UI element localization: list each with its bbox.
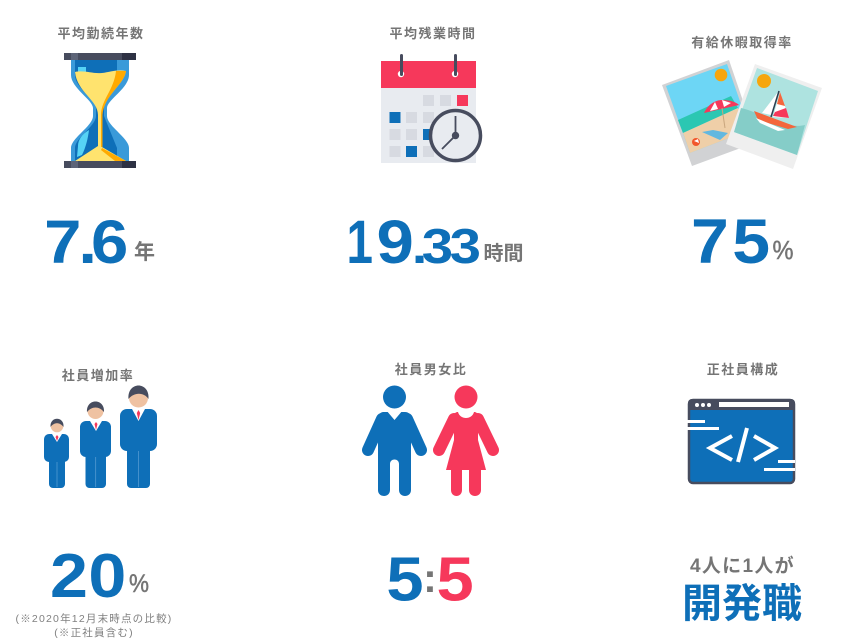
- heading: average tenure: 平均勤続年数: [57, 26, 145, 41]
- small employee: [44, 419, 69, 488]
- panel: gender ratio: [368, 362, 493, 614]
- heading: paid leave rate: 有給休暇取得率: [691, 35, 793, 50]
- value: 20 percent: %: [129, 570, 149, 598]
- value: 5 to 5 ratio: :: [423, 555, 437, 601]
- heading: employee growth rate: 社員増加率: [62, 368, 134, 383]
- value: 7.6 years: 年: [134, 241, 155, 264]
- value: 1 in 4 are developers: 開発職: [682, 582, 802, 626]
- footnote: comparison basis: (※2020年12月末時点の比較): [16, 612, 172, 625]
- value: 75 percent: %: [772, 235, 794, 265]
- icon: hourglass: [64, 53, 136, 168]
- value: 5 to 5 ratio: [386, 545, 474, 614]
- icon: code window: [687, 399, 795, 483]
- value: 20 percent: 20: [50, 541, 126, 610]
- value: 75 percent: 75: [691, 206, 770, 276]
- value: 19.33 hours: 1: [346, 207, 373, 276]
- panel: employee growth rate: [16, 368, 172, 638]
- footnote: comparison basis: [16, 612, 172, 638]
- icon: three growing employees: [44, 386, 157, 488]
- medium employee: [80, 402, 111, 488]
- value: 19.33 hours: 9: [377, 208, 414, 276]
- panel: average overtime: [346, 26, 524, 276]
- value: 19.33 hours: 時間: [484, 242, 524, 265]
- icon: calendar with clock: [381, 54, 480, 163]
- heading: regular employee composition: 正社員構成: [707, 362, 779, 377]
- panel: regular employee composition: [682, 362, 802, 626]
- icon: vacation photos: [662, 60, 822, 169]
- value: 19.33 hours: .33: [412, 219, 481, 274]
- large employee: [120, 386, 157, 488]
- heading: gender ratio: 社員男女比: [395, 362, 467, 377]
- icon: male figure: [368, 386, 421, 496]
- panel: paid leave rate: [662, 35, 822, 276]
- heading: average overtime: 平均残業時間: [389, 26, 477, 41]
- value: 5 to 5 ratio: 5: [386, 545, 424, 614]
- icon: female figure: [439, 386, 493, 496]
- value: 7.6 years: 7.6: [44, 208, 128, 276]
- value: 1 in 4 are developers: [682, 554, 802, 626]
- value: 1 in 4 are developers: 4人に1人が: [690, 554, 795, 577]
- value: 5 to 5 ratio: 5: [437, 545, 474, 614]
- value: 19.33 hours: [346, 207, 524, 276]
- panel: average tenure: [44, 26, 155, 276]
